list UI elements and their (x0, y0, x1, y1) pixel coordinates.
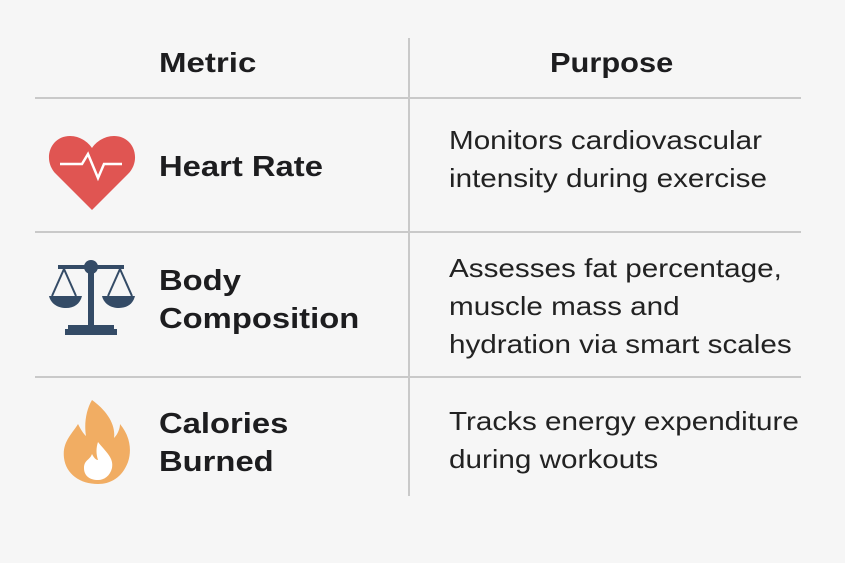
label: Body Composition (159, 265, 359, 335)
icon: flame (64, 400, 130, 484)
text: calories purpose: Tracks energy expenditure (449, 406, 799, 436)
label: Body Composition: Body (159, 265, 241, 297)
text: heart rate purpose (449, 125, 767, 193)
heading: Purpose: Purpose (550, 47, 673, 78)
label: Calories Burned: Calories (159, 408, 288, 440)
text: calories purpose (449, 406, 799, 474)
text: body composition purpose (449, 253, 792, 359)
label: Calories Burned: Burned (159, 446, 274, 478)
icon: scale (49, 260, 135, 335)
text: body composition purpose: Assesses fat percentage, (449, 253, 782, 283)
text: heart rate purpose: intensity during exercise (449, 163, 767, 193)
text: calories purpose: during workouts (449, 444, 658, 474)
label: Body Composition: Composition (159, 303, 359, 335)
label: Calories Burned (159, 408, 288, 478)
icon: heart (48, 136, 136, 210)
text: body composition purpose: muscle mass and (449, 291, 680, 321)
heading: Metric: Metric (159, 47, 256, 78)
text: heart rate purpose: Monitors cardiovascular (449, 125, 762, 155)
text: body composition purpose: hydration via smart scales (449, 329, 792, 359)
label: Heart Rate: Heart Rate (159, 151, 323, 183)
